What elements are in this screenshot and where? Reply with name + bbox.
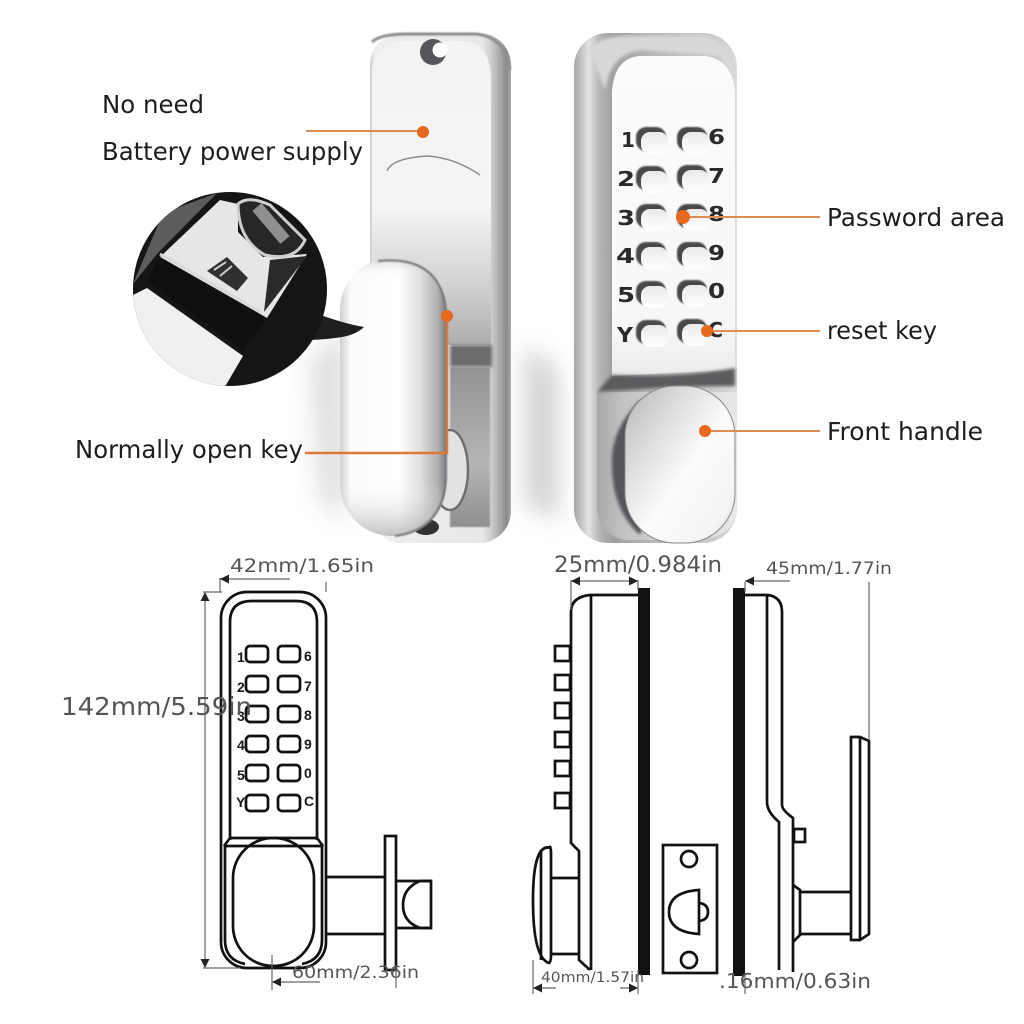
- dimension text: 25mm: 25mm/0.984in: [554, 553, 722, 578]
- keypad digits: 4: [616, 244, 635, 268]
- keypad digits: 2: [617, 167, 635, 191]
- label: no battery: Battery power supply: [102, 137, 363, 166]
- shadows: [310, 330, 345, 520]
- keypad labels: 8: [304, 707, 312, 723]
- callout lines and dots: [305, 126, 820, 453]
- bottom screw hole: [413, 519, 439, 535]
- label: normally open key: Normally open key: [75, 435, 303, 464]
- dimension text: 16mm: .16mm/0.63in: [719, 969, 871, 993]
- dimension text: 40mm: 40mm/1.57in: [541, 970, 644, 986]
- dimension text: 142mm: 142mm/5.59in: [61, 692, 252, 721]
- diagram: right side view: [733, 588, 869, 976]
- keypad labels: 7: [304, 678, 312, 694]
- diagram: strike plate: [663, 845, 717, 973]
- keypad labels: 3: [237, 708, 245, 724]
- keypad digits: 6: [708, 125, 725, 149]
- diagram: left side view: [533, 588, 650, 975]
- lower housing: [597, 392, 737, 540]
- keypad labels: 1: [237, 649, 245, 665]
- dimension text: 42mm: 42mm/1.65in: [230, 555, 374, 577]
- keypad digits: 3: [617, 206, 635, 230]
- diagram: front view: [221, 592, 431, 970]
- label: reset key: reset key: [827, 316, 937, 345]
- keypad labels: 5: [237, 767, 245, 783]
- keypad digits: 5: [617, 283, 635, 307]
- label: front handle: Front handle: [827, 417, 983, 446]
- top screw hole: [420, 39, 446, 65]
- direction arc: [387, 156, 480, 175]
- keypad face: [612, 56, 735, 376]
- thumb handle: [340, 258, 446, 536]
- spindle ring: [432, 430, 468, 510]
- keypad labels: 4: [237, 737, 245, 753]
- keypad digits: 7: [708, 164, 725, 188]
- photo: keypad lock: [574, 33, 737, 543]
- keypad digits: 8: [708, 202, 725, 226]
- keypad labels: 6: [304, 648, 312, 664]
- magnified detail circle: [130, 192, 364, 390]
- label: no battery: [102, 90, 363, 166]
- keypad digits: 1: [621, 128, 635, 152]
- keypad labels: 2: [237, 679, 245, 695]
- keypad outline buttons: [246, 646, 300, 811]
- keypad labels: Y: [236, 794, 246, 810]
- keypad digits: [616, 125, 725, 347]
- dimension text: 60mm: 60mm/2.36in: [292, 963, 419, 983]
- label: no battery: No need: [102, 90, 204, 119]
- spindle and latch: [326, 877, 385, 934]
- keypad labels: C: [304, 793, 314, 809]
- keypad digits: 9: [708, 241, 725, 265]
- buttons: [636, 127, 709, 347]
- dimensions: front view: [61, 555, 419, 990]
- dimension text: 45mm: 45mm/1.77in: [766, 559, 892, 579]
- keypad labels: 9: [304, 736, 312, 752]
- dimensions: side views: [533, 553, 892, 994]
- front knob: [612, 386, 735, 543]
- keypad labels: 0: [304, 765, 312, 781]
- keypad digits: 0: [708, 279, 725, 303]
- label: password area: Password area: [827, 203, 1005, 232]
- keypad digits: C: [708, 318, 723, 342]
- keypad labels: [236, 648, 314, 810]
- photo: back plate lock: [310, 33, 558, 543]
- keypad digits: Y: [616, 323, 634, 347]
- handle: [233, 838, 314, 966]
